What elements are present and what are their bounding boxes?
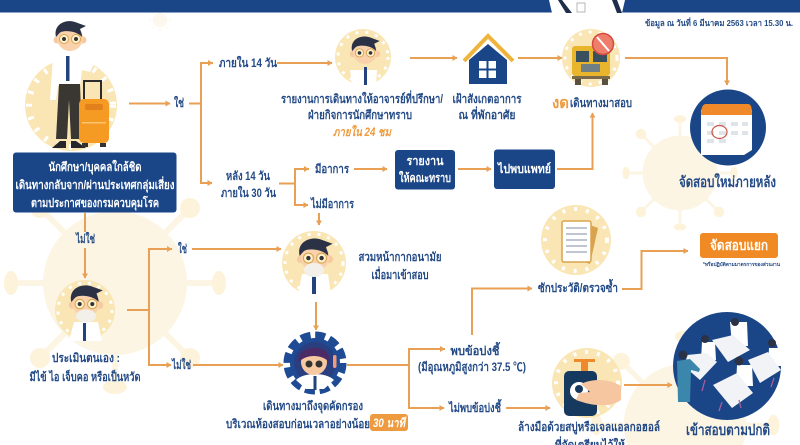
label: yes: ใช่	[174, 95, 184, 110]
label: after 14 days within 30 days: ภายใน 30 วัน	[221, 185, 277, 200]
arrow: to yes	[129, 102, 170, 104]
box: report to faculty	[395, 150, 455, 190]
label: no: ไม่ใช่	[75, 231, 95, 246]
arrow tip: indicators found	[440, 346, 445, 352]
text: suspend travel to exam: งด	[552, 95, 569, 112]
arrow: to normal exam	[624, 384, 672, 386]
footnote: separate exam: *หรือปฏิบัติตามมาตรการของส่วนงาน	[703, 261, 781, 268]
arrow: doctor to suspend travel	[557, 113, 592, 169]
icon: hand sanitiser	[552, 348, 622, 418]
arrow: to doctor box	[458, 168, 491, 170]
icon: clipboard	[541, 205, 611, 275]
button: separate exam: จัดสอบแยก	[710, 237, 768, 253]
box: student / close contact: นักศึกษา/บุคคลใกล้ชิด	[48, 159, 142, 175]
branch: indicators found / not found	[347, 349, 445, 408]
text: monitor symptoms: เฝ้าสังเกตอาการ	[452, 92, 522, 106]
icon: exam room	[673, 312, 782, 420]
text: arrive at screening point: บริเวณห้องสอบก่อนเวลาอย่างน้อย	[226, 417, 370, 431]
background virus: left	[4, 172, 226, 394]
branch: yes / no	[127, 249, 172, 365]
label: indicators found: (มีอุณหภูมิสูงกว่า 37.5 ℃)	[418, 360, 526, 375]
arrow: to hand washing	[506, 407, 550, 409]
arrow tip: has symptoms	[304, 166, 309, 172]
branch: within 14 days / after 14 days	[189, 63, 213, 183]
text: wear mask	[358, 250, 442, 282]
text: arrive at screening point	[226, 399, 370, 431]
box: see a doctor: ไปพบแพทย์	[496, 161, 551, 176]
text: wash hands	[518, 420, 660, 445]
text: report to advisor: รายงานการเดินทางให้อาจารย์ที่ปรึกษา/	[281, 90, 444, 106]
arrow: no to screening	[193, 364, 283, 366]
box: see a doctor	[494, 150, 555, 189]
text: arrive at screening point: เดินทางมาถึงจุดคัดกรอง	[263, 399, 363, 414]
button: separate exam	[700, 233, 778, 258]
label: after 14 days within 30 days	[221, 169, 277, 200]
arrow: yes to mask	[192, 248, 281, 250]
box: student / close contact: เดินทางกลับจาก/ผ่านประเทศกลุ่มเสี่ยง	[16, 176, 175, 193]
icon: student with mask	[55, 280, 115, 341]
box: student / close contact	[13, 152, 176, 212]
background virus: lower right	[591, 331, 779, 445]
arrow: to history check	[472, 288, 532, 335]
arrow: to separate exam	[622, 251, 688, 289]
icon: student with mask, front	[282, 231, 346, 295]
text: report to advisor	[281, 90, 444, 139]
arrow: to report box	[354, 168, 387, 170]
text: wear mask: เมื่อมาเข้าสอบ	[372, 266, 428, 282]
text: self-assessment: ประเมินตนเอง :	[52, 351, 120, 365]
arrow: to self-assessment	[84, 248, 86, 278]
icon: bus with prohibition sign	[562, 29, 620, 87]
text: suspend travel to exam	[552, 95, 632, 112]
label: take history / re-check: ซักประวัติ/ตรวจซ้ำ	[538, 278, 618, 295]
text: self-assessment: มีไข้ ไอ เจ็บคอ หรือเป็นหวัด	[30, 369, 141, 384]
text: report to advisor: ภายใน 24 ชม	[333, 124, 392, 139]
label: after 14 days within 30 days: หลัง 14 วัน	[226, 169, 271, 183]
text: monitor symptoms	[452, 92, 522, 122]
arrow: no symptoms to mask	[318, 213, 320, 225]
arrow: to house	[410, 57, 457, 59]
icon: student reporting	[335, 29, 391, 85]
box: report to faculty: ให้คณะทราบ	[399, 170, 451, 185]
badge: 30 minutes	[370, 414, 408, 431]
label: within 14 days: ภายใน 14 วัน	[219, 55, 278, 70]
header figure	[549, 0, 625, 13]
arrow tip: within 14 days	[208, 60, 213, 66]
text: normal exam: เข้าสอบตามปกติ	[686, 421, 770, 439]
text: suspend travel to exam: เดินทางมาสอบ	[570, 96, 632, 110]
label: has symptoms: มีอาการ	[315, 162, 349, 176]
background virus: right	[622, 115, 738, 231]
arrow: to report	[277, 62, 332, 64]
icon: traveller with suitcase	[25, 21, 117, 151]
label: no symptoms: ไม่มีอาการ	[309, 196, 354, 211]
arrow: bus to calendar	[625, 58, 727, 85]
header band	[0, 0, 800, 12]
text: wash hands: ล้างมือด้วยสบู่หรือเจลแอลกอฮอล์	[518, 420, 660, 435]
box: report to faculty: รายงาน	[406, 154, 444, 168]
line: no, down to self-assessment	[84, 213, 86, 232]
icon: calendar	[690, 90, 766, 166]
box: student / close contact: ตามประกาศของกรมควบคุมโรค	[31, 195, 159, 211]
label: no: ไม่ใช่	[171, 357, 191, 372]
arrow: mask to screening	[315, 302, 317, 330]
arrow tip: yes	[167, 246, 172, 252]
label: indicators found: พบข้อบ่งชี้	[450, 341, 501, 358]
label: indicators found	[418, 341, 526, 375]
badge: 30 minutes: 30 นาที	[373, 416, 407, 430]
icon: screening gear with thermometer	[287, 335, 343, 391]
label: indicators not found: ไม่พบข้อบ่งชี้	[447, 398, 502, 415]
icon: house	[464, 36, 513, 84]
text: report to advisor: ฝ่ายกิจการนักศึกษาทราบ	[308, 108, 412, 122]
text: wear mask: สวมหน้ากากอนามัย	[358, 250, 442, 264]
arrow: to bus	[518, 57, 562, 59]
branch: symptoms or not	[279, 169, 309, 205]
label: yes: ใช่	[178, 241, 187, 256]
text: self-assessment	[30, 351, 141, 384]
background virus: top	[149, 9, 171, 31]
text: monitor symptoms: ณ ที่พักอาศัย	[458, 106, 516, 122]
